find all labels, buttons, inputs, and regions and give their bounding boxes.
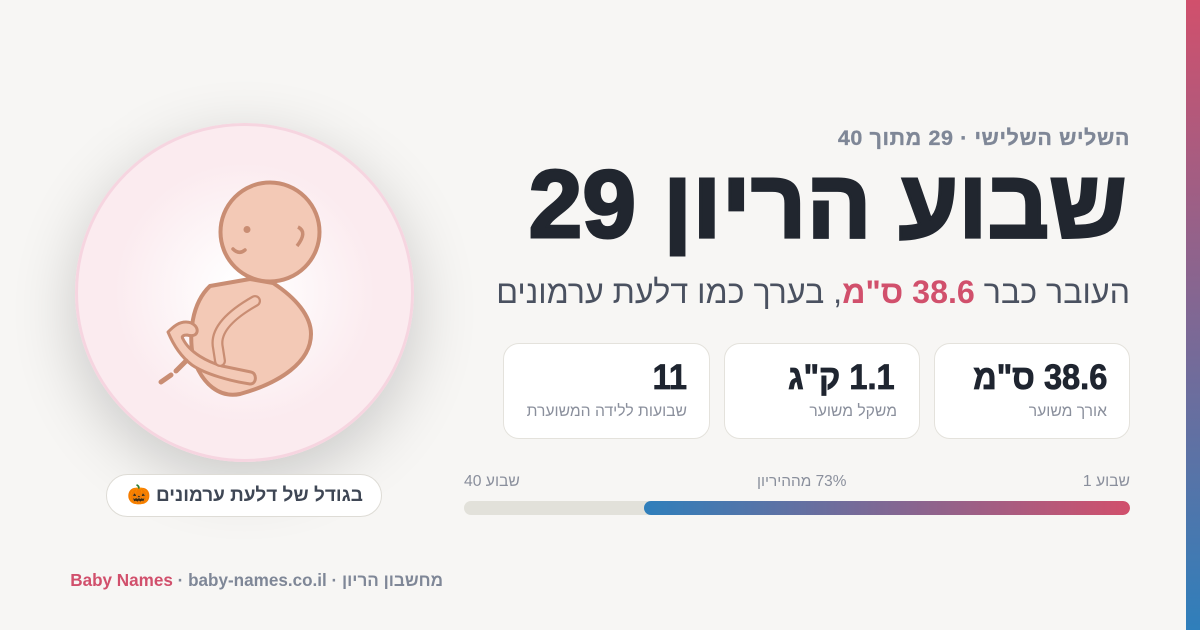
subtitle: העובר כבר 38.6 ס"מ, בערך כמו דלעת ערמונים (496, 274, 1130, 310)
accent bar (1186, 0, 1200, 630)
stat card: weeks left: 11 (653, 358, 687, 397)
stat card: weeks left (503, 343, 710, 439)
title: שבוע הריון 29 (529, 151, 1127, 258)
size badge (106, 474, 382, 517)
progress labels: שבוע 40 (464, 473, 520, 490)
progress bar (464, 501, 1130, 515)
progress labels (464, 473, 1130, 490)
stat card: weight (724, 343, 920, 439)
stat card: weight: 1.1 ק"ג (788, 358, 895, 397)
stat card: length: 38.6 ס"מ (973, 358, 1107, 397)
progress labels: 73% מההיריון (757, 473, 846, 490)
eyebrow: השליש השלישי · 29 מתוך 40 (838, 126, 1130, 150)
icon: fetus (158, 180, 322, 397)
stat card: length: אורך משוער (1029, 403, 1107, 420)
stat card: weight: משקל משוער (809, 403, 897, 420)
stat card: length (934, 343, 1130, 439)
footer credit: מחשבון הריון · baby-names.co.il · Baby Names (70, 571, 443, 590)
illustration circle (75, 123, 414, 462)
size badge: בגודל של דלעת ערמונים 🎃 (127, 485, 363, 506)
progress labels: שבוע 1 (1083, 473, 1130, 490)
stat card: weeks left: שבועות ללידה המשוערת (527, 403, 687, 420)
